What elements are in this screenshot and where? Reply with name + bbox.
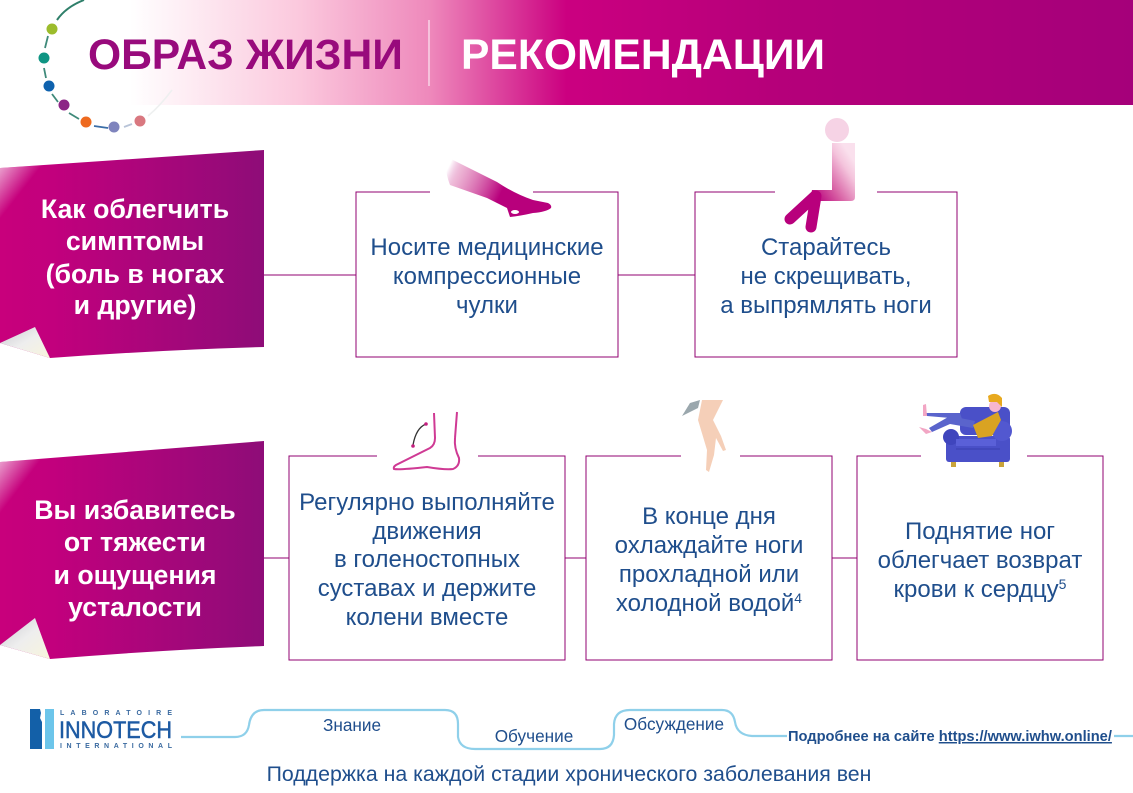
logo: Innotech: INNOTECH: [59, 717, 172, 744]
panel: do not cross legs: не скрещивать,: [740, 263, 912, 290]
wave line: [181, 710, 1133, 749]
icon: foot outline: [394, 412, 459, 469]
logo: Innotech: [30, 709, 173, 750]
panel: cool water: [586, 400, 832, 660]
logo: Innotech: LABORATOIRE: [60, 710, 172, 717]
footer label: education: Обучение: [495, 726, 573, 746]
footer tagline: Поддержка на каждой стадии хронического заболевания вен: [267, 762, 871, 786]
panel: compression stockings: чулки: [456, 292, 518, 319]
panel: do not cross legs: а выпрямлять ноги: [720, 292, 932, 319]
panel: cool water: 4: [794, 590, 802, 606]
icon: legs with shower: [682, 400, 726, 472]
panel: cool water: охлаждайте ноги: [615, 532, 803, 559]
panel: heaviness and fatigue ribbon: Вы избавитесь: [34, 495, 236, 525]
panel: ankle exercises: движения: [372, 518, 482, 545]
icon: person in armchair: [919, 394, 1012, 467]
icon: stocking leg: [446, 157, 551, 217]
panel: symptom relief ribbon: (боль в ногах: [46, 259, 225, 289]
panel: cool water: прохладной или: [619, 561, 799, 588]
panel: ankle exercises: Регулярно выполняйте: [299, 489, 555, 516]
title: ОБРАЗ ЖИЗНИ: [88, 31, 403, 79]
page curl: [0, 327, 50, 358]
panel: compression stockings: Носите медицинские: [370, 234, 604, 261]
panel: symptom relief ribbon: и другие): [74, 290, 196, 320]
panel: raising legs: облегчает возврат: [878, 547, 1082, 574]
decorative dotted arc: [38, 0, 172, 132]
panel: ankle exercises: в голеностопных: [334, 546, 520, 573]
panel: heaviness and fatigue ribbon: усталости: [68, 592, 202, 622]
panel: raising legs: 5: [1059, 576, 1067, 592]
panel: raising legs: Поднятие ног: [905, 518, 1055, 545]
panel: do not cross legs: [695, 118, 957, 357]
panel: raising legs: крови к сердцу: [894, 576, 1059, 603]
connectors row 1: [264, 274, 695, 276]
footer label: discussion: Обсуждение: [624, 714, 724, 734]
panel: raising legs: [857, 394, 1103, 660]
panel: compression stockings: [356, 157, 618, 357]
panel: compression stockings: компрессионные: [393, 263, 581, 290]
footer label: knowledge: Знание: [323, 715, 381, 735]
icon: seated figure: [790, 118, 855, 227]
panel: ankle exercises: колени вместе: [346, 604, 508, 631]
panel: ankle exercises: суставах и держите: [318, 575, 536, 602]
connectors row 2: [264, 557, 857, 559]
panel: do not cross legs: Старайтесь: [761, 234, 891, 261]
panel: heaviness and fatigue ribbon: и ощущения: [54, 560, 216, 590]
header divider: [428, 20, 430, 86]
panel: cool water: холодной водой: [616, 590, 794, 617]
panel: symptom relief ribbon: [0, 150, 264, 358]
panel: symptom relief ribbon: Как облегчить: [41, 194, 229, 224]
panel: cool water: В конце дня: [642, 503, 776, 530]
panel: ankle exercises: [289, 412, 565, 660]
panel: symptom relief ribbon: симптомы: [66, 226, 204, 256]
header band: [0, 0, 1133, 105]
page curl: [0, 618, 50, 659]
panel: heaviness and fatigue ribbon: [0, 441, 264, 659]
logo: Innotech: INTERNATIONAL: [60, 743, 173, 750]
panel: heaviness and fatigue ribbon: от тяжести: [64, 527, 206, 557]
website link: Подробнее на сайте https://www.iwhw.online/: [788, 729, 1112, 745]
subtitle: РЕКОМЕНДАЦИИ: [461, 31, 825, 79]
